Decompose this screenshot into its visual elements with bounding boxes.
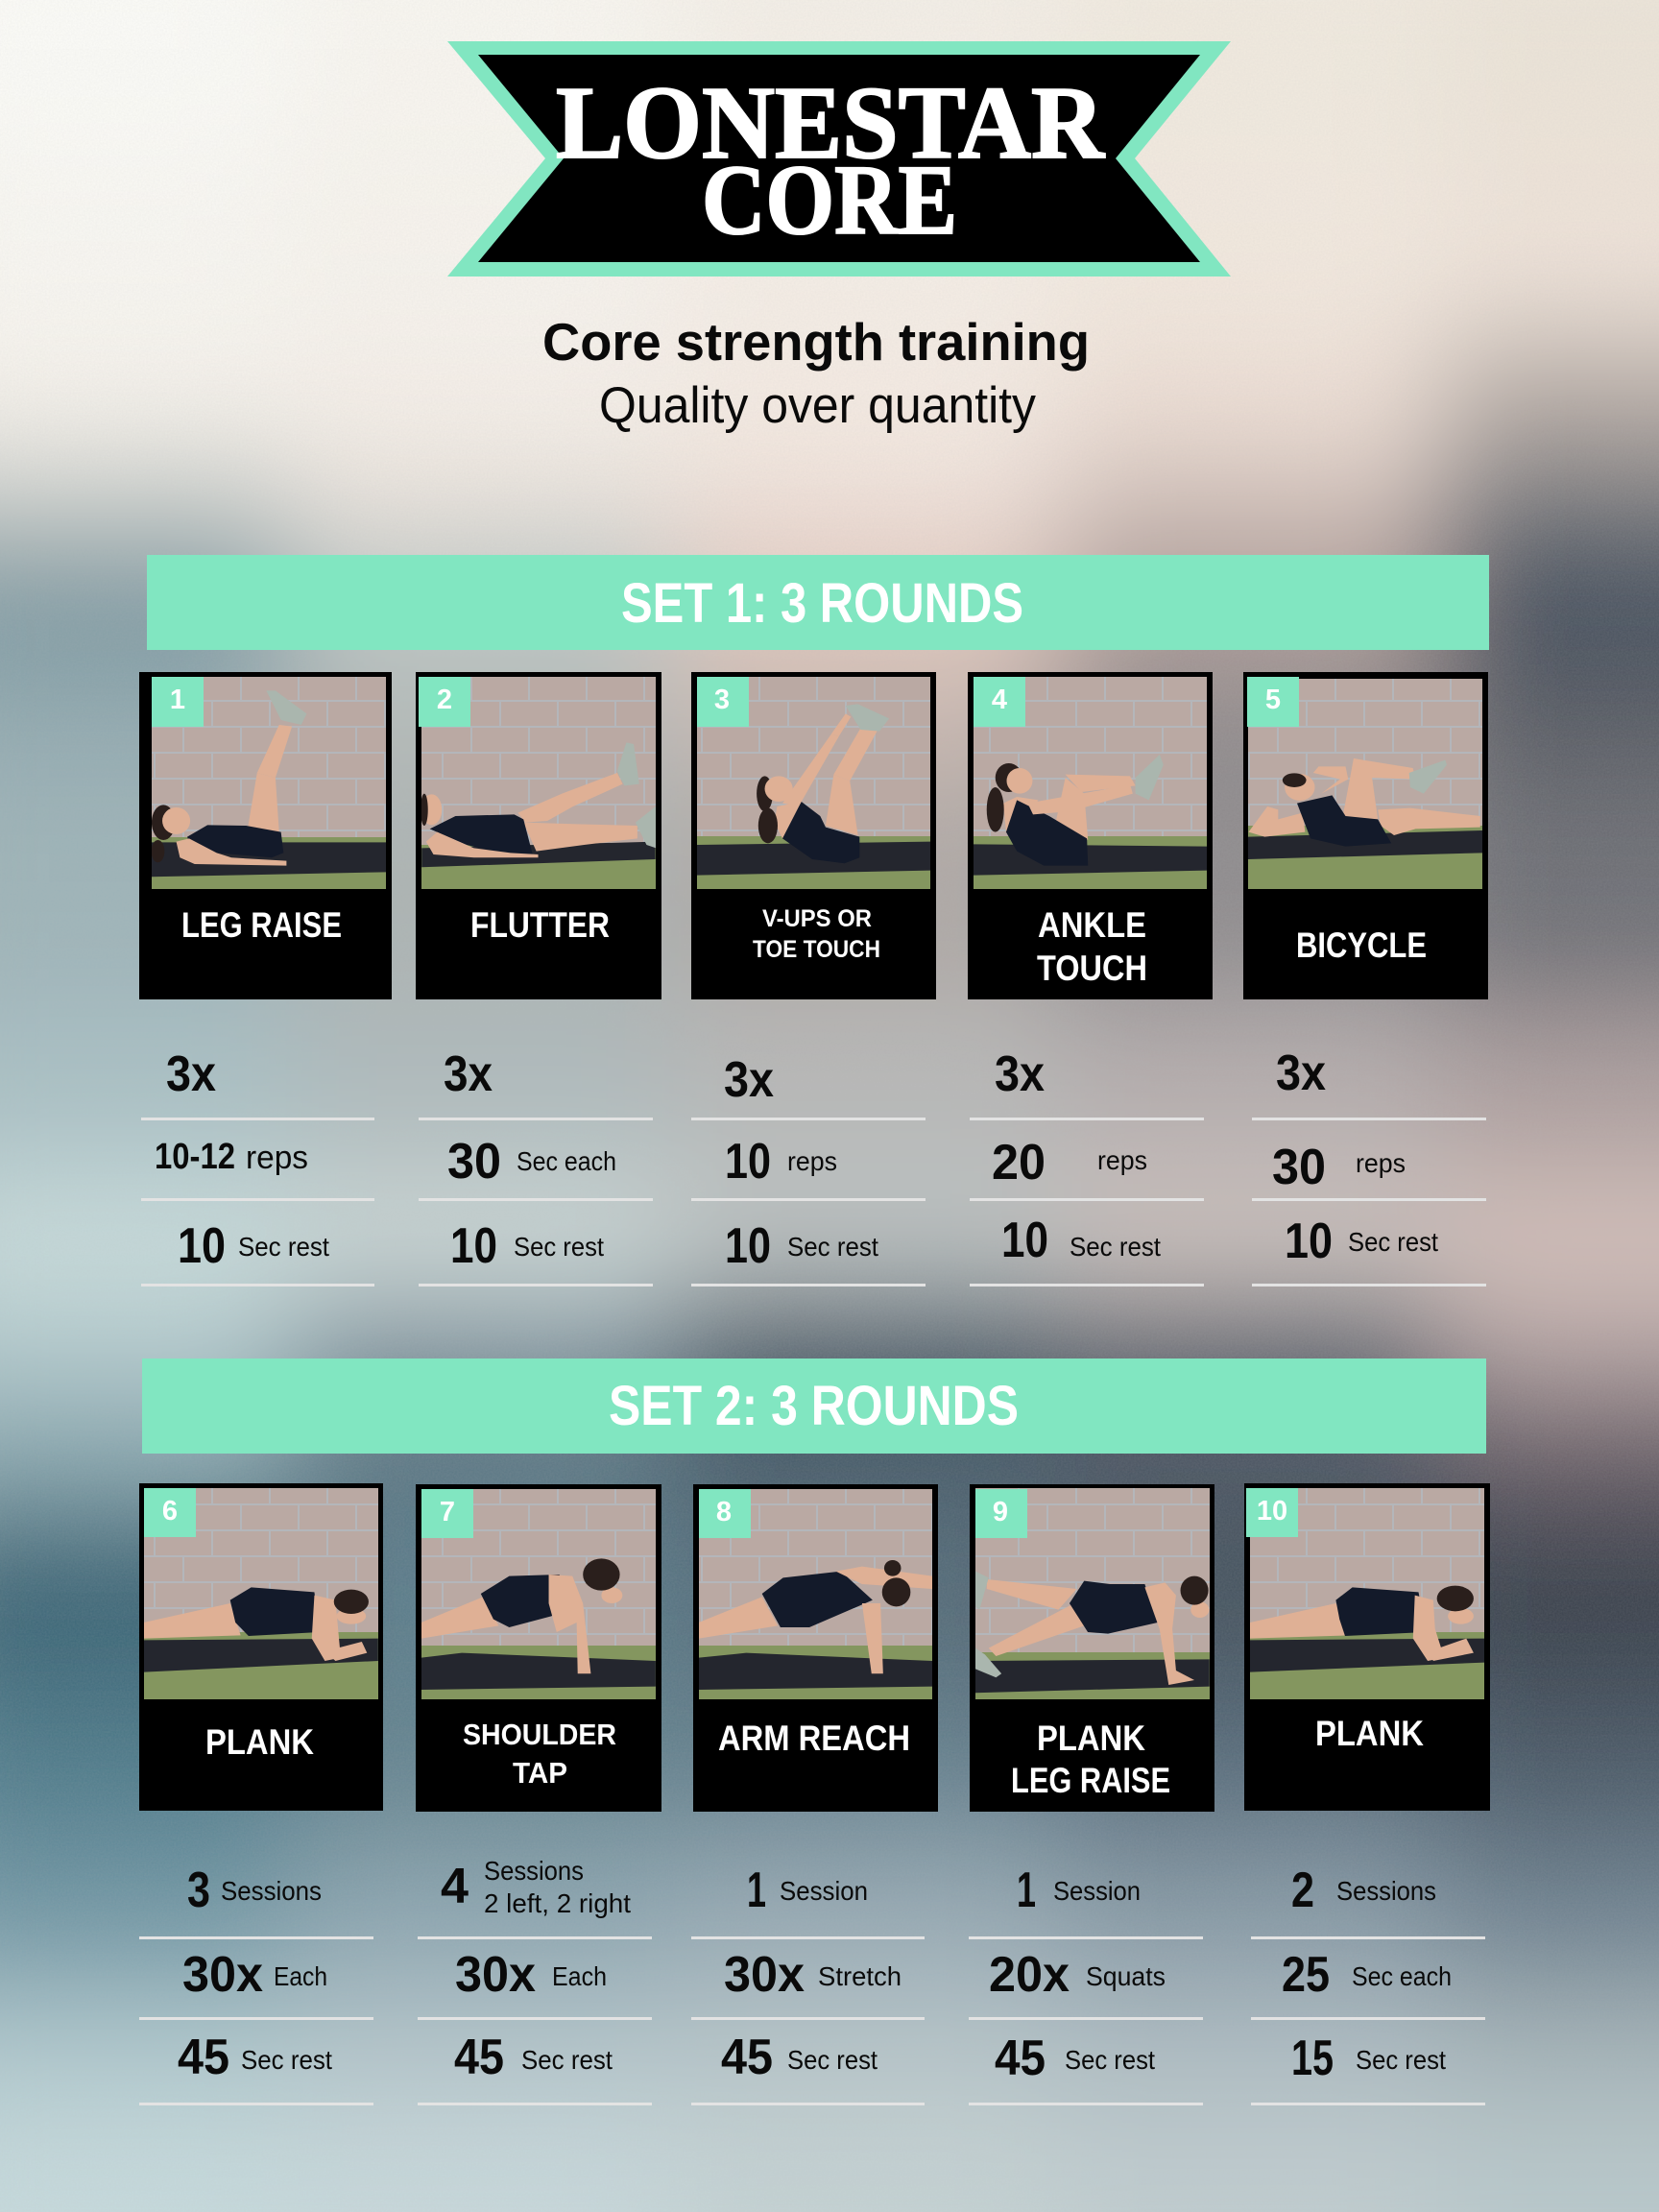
label: plank: PLANK	[1315, 1714, 1424, 1753]
sessions: 4	[441, 1859, 469, 1914]
rest	[725, 1218, 878, 1274]
card 2: flutter	[416, 672, 661, 999]
rest	[450, 1218, 604, 1274]
stats: exercise 2	[444, 1046, 616, 1274]
rest	[178, 1218, 329, 1274]
label: shoulder tap	[463, 1718, 616, 1790]
stats: exercise 9	[989, 1863, 1166, 2086]
duration	[447, 1134, 616, 1190]
sets: 3x	[995, 1046, 1045, 1102]
sessions: Session	[780, 1876, 868, 1906]
label: ankle touch: TOUCH	[1037, 949, 1147, 988]
badge 3: 3	[714, 685, 730, 715]
rest: Sec rest	[521, 2045, 613, 2075]
card 10: plank	[1244, 1483, 1490, 1811]
badge 7: 7	[440, 1497, 455, 1527]
rest: 10	[178, 1218, 226, 1274]
card 7: shoulder tap	[416, 1484, 661, 1812]
label: plank leg raise: LEG RAISE	[1011, 1761, 1170, 1800]
rest: 45	[454, 2030, 504, 2085]
sessions: Sessions	[221, 1876, 322, 1906]
badge 8	[699, 1489, 751, 1538]
set 1 header: SET 1: 3 ROUNDS	[621, 572, 1023, 635]
badge 6	[144, 1488, 196, 1537]
card 1: leg raise	[139, 672, 392, 999]
label: arm reach: ARM REACH	[718, 1719, 910, 1758]
photo 5	[1248, 679, 1482, 889]
reps: 10	[725, 1134, 771, 1190]
title text: CORE	[702, 145, 957, 255]
reps	[725, 1134, 837, 1190]
stats: exercise 4	[992, 1046, 1161, 1268]
sessions: 2 left, 2 right	[484, 1888, 631, 1918]
reps	[992, 1135, 1147, 1190]
duration: 25	[1282, 1947, 1330, 2003]
reps	[155, 1137, 308, 1177]
sessions	[747, 1863, 868, 1918]
photo 4	[974, 677, 1207, 889]
count: Stretch	[818, 1961, 902, 1991]
sets: 3x	[166, 1046, 216, 1102]
card 8: arm reach	[693, 1484, 938, 1812]
stats: exercise 6	[178, 1863, 332, 2085]
count: Each	[274, 1961, 327, 1991]
badge 2	[419, 677, 470, 727]
badge 2: 2	[437, 685, 452, 715]
rest: 10	[450, 1218, 497, 1274]
sets: 3x	[724, 1052, 774, 1108]
sessions: 1	[1017, 1863, 1036, 1918]
count: 30x	[455, 1947, 536, 2003]
badge 4: 4	[992, 685, 1007, 715]
rest: Sec rest	[1356, 2045, 1446, 2075]
stats: exercise 8	[721, 1863, 902, 2085]
rest: 10	[725, 1218, 771, 1274]
sessions	[187, 1863, 322, 1918]
set 2 header	[142, 1358, 1486, 1454]
label: plank leg raise: PLANK	[1037, 1719, 1145, 1758]
stats: exercise 10	[1282, 1863, 1452, 2086]
rest: 15	[1291, 2031, 1334, 2086]
card 5: bicycle	[1243, 672, 1488, 999]
badge 1: 1	[170, 685, 185, 715]
badge 9: 9	[993, 1497, 1008, 1527]
badge 5: 5	[1265, 685, 1281, 715]
sessions: Sessions	[484, 1856, 584, 1886]
rest: Sec rest	[1348, 1227, 1438, 1257]
rest: Sec rest	[514, 1232, 604, 1262]
photo 6	[144, 1488, 378, 1699]
rest	[1285, 1214, 1438, 1269]
stats: exercise 7	[441, 1856, 631, 2085]
count: Each	[552, 1961, 607, 1991]
sets: 3x	[444, 1046, 493, 1102]
duration: Sec each	[1352, 1961, 1452, 1991]
badge 9	[975, 1489, 1027, 1538]
title text	[556, 66, 1105, 255]
photo 9	[975, 1488, 1210, 1699]
rest	[1291, 2031, 1446, 2086]
count	[724, 1947, 902, 2003]
sets: 3x	[1276, 1046, 1326, 1101]
badge 8: 8	[716, 1497, 732, 1527]
card 9: plank leg raise	[970, 1484, 1214, 1812]
rest	[721, 2030, 878, 2085]
rest: Sec rest	[1070, 1232, 1161, 1262]
photo 2	[421, 677, 656, 889]
tagline: Quality over quantity	[599, 377, 1036, 434]
count	[989, 1947, 1166, 2003]
rest: 45	[995, 2031, 1046, 2086]
rest	[178, 2030, 332, 2085]
photo 10	[1250, 1488, 1484, 1699]
count: Squats	[1086, 1961, 1166, 1991]
label: v-ups or toe touch: TOE TOUCH	[753, 936, 880, 963]
count: 20x	[989, 1947, 1070, 2003]
stats: exercise 1	[155, 1046, 329, 1274]
badge 7	[421, 1489, 473, 1538]
rest: Sec rest	[238, 1232, 329, 1262]
photo 7	[421, 1489, 656, 1699]
label: v-ups or toe touch: V-UPS OR	[762, 905, 872, 932]
rest: 10	[1285, 1214, 1333, 1269]
set 1 header	[147, 555, 1489, 650]
card 3: v-ups or toe touch	[691, 672, 936, 999]
sessions	[441, 1856, 631, 1918]
label: ankle touch: ANKLE	[1038, 905, 1146, 945]
rest: 45	[178, 2030, 229, 2085]
label: bicycle: BICYCLE	[1296, 926, 1427, 965]
rest: Sec rest	[787, 2045, 878, 2075]
card 6: plank	[139, 1483, 383, 1811]
count	[455, 1947, 607, 2003]
label: plank: PLANK	[205, 1722, 314, 1762]
rest	[995, 2031, 1155, 2086]
badge 10: 10	[1257, 1496, 1287, 1527]
rest: Sec rest	[1065, 2045, 1155, 2075]
badge 3	[697, 677, 749, 727]
label: flutter: FLUTTER	[470, 905, 610, 945]
reps: 30	[1272, 1140, 1326, 1195]
reps	[1272, 1140, 1406, 1195]
count	[182, 1947, 327, 2003]
count: 30x	[724, 1947, 805, 2003]
label: shoulder tap: TAP	[513, 1756, 567, 1790]
set 2 header: SET 2: 3 ROUNDS	[609, 1375, 1019, 1437]
badge 5	[1247, 677, 1299, 727]
reps: reps	[246, 1140, 308, 1176]
title text: LONESTAR	[556, 66, 1105, 180]
stats: exercise 5	[1272, 1046, 1438, 1269]
title banner	[447, 41, 1231, 276]
sessions	[1017, 1863, 1141, 1918]
label: plank leg raise	[1011, 1719, 1170, 1800]
rest: 10	[1001, 1213, 1048, 1268]
rest	[1001, 1213, 1161, 1268]
reps: reps	[1356, 1148, 1406, 1178]
reps: 10-12	[155, 1137, 235, 1177]
duration	[1282, 1947, 1452, 2003]
rest: Sec rest	[241, 2045, 332, 2075]
rest: Sec rest	[787, 1232, 878, 1262]
sessions: Sessions	[1336, 1876, 1436, 1906]
duration: Sec each	[517, 1146, 616, 1176]
badge 1	[152, 677, 204, 727]
sessions: Session	[1053, 1876, 1141, 1906]
badge 6: 6	[162, 1496, 178, 1527]
stats: exercise 3	[724, 1052, 878, 1274]
label: shoulder tap: SHOULDER	[463, 1718, 616, 1751]
rest: 45	[721, 2030, 773, 2085]
photo 8	[699, 1489, 932, 1699]
sessions: 1	[747, 1863, 766, 1918]
count: 30x	[182, 1947, 263, 2003]
card 4: ankle touch	[968, 672, 1213, 999]
photo 1	[152, 677, 386, 889]
rest	[454, 2030, 613, 2085]
banner ribbon inner	[478, 55, 1200, 262]
reps: reps	[787, 1146, 837, 1176]
sessions: 2	[1291, 1863, 1314, 1918]
label: ankle touch	[1037, 905, 1147, 988]
badge 4	[974, 677, 1025, 727]
reps: 20	[992, 1135, 1046, 1190]
reps: reps	[1097, 1145, 1147, 1175]
duration: 30	[447, 1134, 501, 1190]
sessions: 3	[187, 1863, 210, 1918]
subtitle: Core strength training	[542, 312, 1090, 372]
banner ribbon outer	[447, 41, 1231, 276]
badge 10	[1246, 1488, 1298, 1537]
sessions	[1291, 1863, 1436, 1918]
photo 3	[697, 677, 930, 889]
label: v-ups or toe touch	[753, 905, 880, 963]
label: leg raise: LEG RAISE	[181, 905, 342, 945]
